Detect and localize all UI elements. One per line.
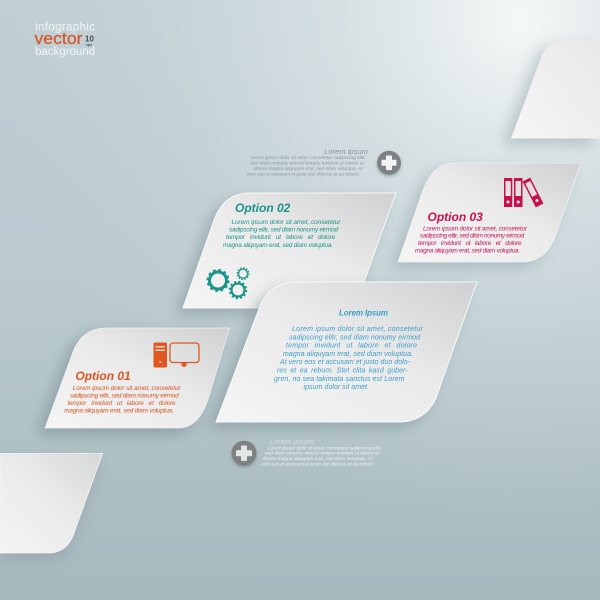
top note: vero eos et accusam et justo duo dolores et ea rebum.: [247, 171, 360, 177]
bottom note: Lorem ipsum dolor sit amet, consetetur sadipscing elitr,: [268, 445, 382, 451]
heading: lorem ipsum: Lorem Ipsum: [339, 308, 388, 318]
text: central: ipsum dolor sit amet.: [304, 384, 369, 391]
text: option 02: magna aliquyam erat, sed diam voluptua.: [223, 242, 333, 249]
text: central: gren, no sea takimata sanctus est Lorem: [274, 376, 405, 383]
text: central: At vero eos et accusam et justo duo dolo-: [279, 359, 411, 366]
text: option 03: Lorem ipsum dolor sit amet, consetetur: [423, 225, 528, 232]
text: option 02: tempor invidunt ut labore et dolore: [226, 234, 335, 241]
logo: 10: [85, 34, 94, 44]
panel: option 03: [391, 163, 581, 268]
panel: option 01: [38, 328, 230, 434]
text: option 03: magna aliquyam erat, sed diam voluptua.: [415, 247, 520, 254]
panel: top right blank tab: [503, 40, 600, 144]
bottom note: [261, 437, 382, 467]
icon: plus bottom: [232, 441, 256, 468]
text: central: Lorem ipsum dolor sit amet, consetetur: [292, 326, 424, 333]
heading: option 02: Option 02: [235, 201, 291, 215]
icon: gears: [208, 268, 249, 298]
panel: option 02: [176, 193, 396, 314]
text: option 01: magna aliquyam erat, sed diam voluptua.: [64, 407, 174, 414]
icon: binders: [504, 178, 543, 207]
logo: background: [35, 46, 95, 58]
text: central: [274, 326, 424, 391]
text: option 02: [223, 219, 341, 249]
bottom note: dolore magna aliquyam erat, sed diam voluptua. At: [263, 456, 373, 462]
icon: computer: [154, 342, 199, 368]
top note: dolore magna aliquyam erat, sed diam voluptua. At: [254, 166, 363, 172]
text: option 03: sadipscing elitr, sed diam nonumy eirmod: [420, 233, 524, 240]
text: option 03: [415, 225, 528, 254]
logo: [34, 22, 95, 58]
text: option 03: tempor invidunt ut labore et dolore: [418, 240, 522, 247]
bottom note: sed diam nonumy eirmod tempor invidunt ut labore et: [265, 451, 380, 457]
text: option 02: sadipscing elitr, sed diam nonumy eirmod: [229, 226, 338, 234]
bottom note: Lorem Ipsum: [270, 437, 314, 446]
top note: sed diam nonumy eirmod tempor invidunt ut labore et: [251, 161, 364, 167]
text: central: res et ea rebum. Stet clita kasd guber-: [277, 367, 408, 374]
logo: eps: [86, 43, 92, 47]
top note: Lorem Ipsum: [324, 147, 368, 156]
logo: vector: [34, 30, 83, 48]
text: central: sadipscing elitr, sed diam nonumy eirmod: [289, 334, 421, 342]
text: option 02: Lorem ipsum dolor sit amet, consetetur: [232, 219, 341, 226]
text: option 01: sadipscing elitr, sed diam nonumy eirmod: [70, 392, 179, 399]
panel: central text card: [209, 282, 477, 428]
top note: [247, 147, 368, 177]
bottom note: vero eos et accusam et justo duo dolores et ea rebum.: [261, 461, 374, 467]
panel: bottom left blank tab: [0, 454, 102, 559]
text: central: tempor invidunt ut labore et dolore: [286, 342, 417, 350]
text: central: magna aliquyam erat, sed diam voluptua.: [283, 351, 413, 358]
icon: plus top: [377, 151, 401, 176]
logo: infographic: [35, 22, 95, 34]
text: option 01: Lorem ipsum dolor sit amet, consetetur: [73, 385, 182, 392]
text: option 01: [64, 385, 182, 414]
top note: Lorem ipsum dolor sit amet, consetetur sadipscing elitr,: [251, 155, 366, 161]
heading: option 01: Option 01: [75, 369, 131, 383]
text: option 01: tempor invidunt ut labore et dolore: [67, 400, 176, 407]
heading: option 03: Option 03: [428, 210, 483, 224]
